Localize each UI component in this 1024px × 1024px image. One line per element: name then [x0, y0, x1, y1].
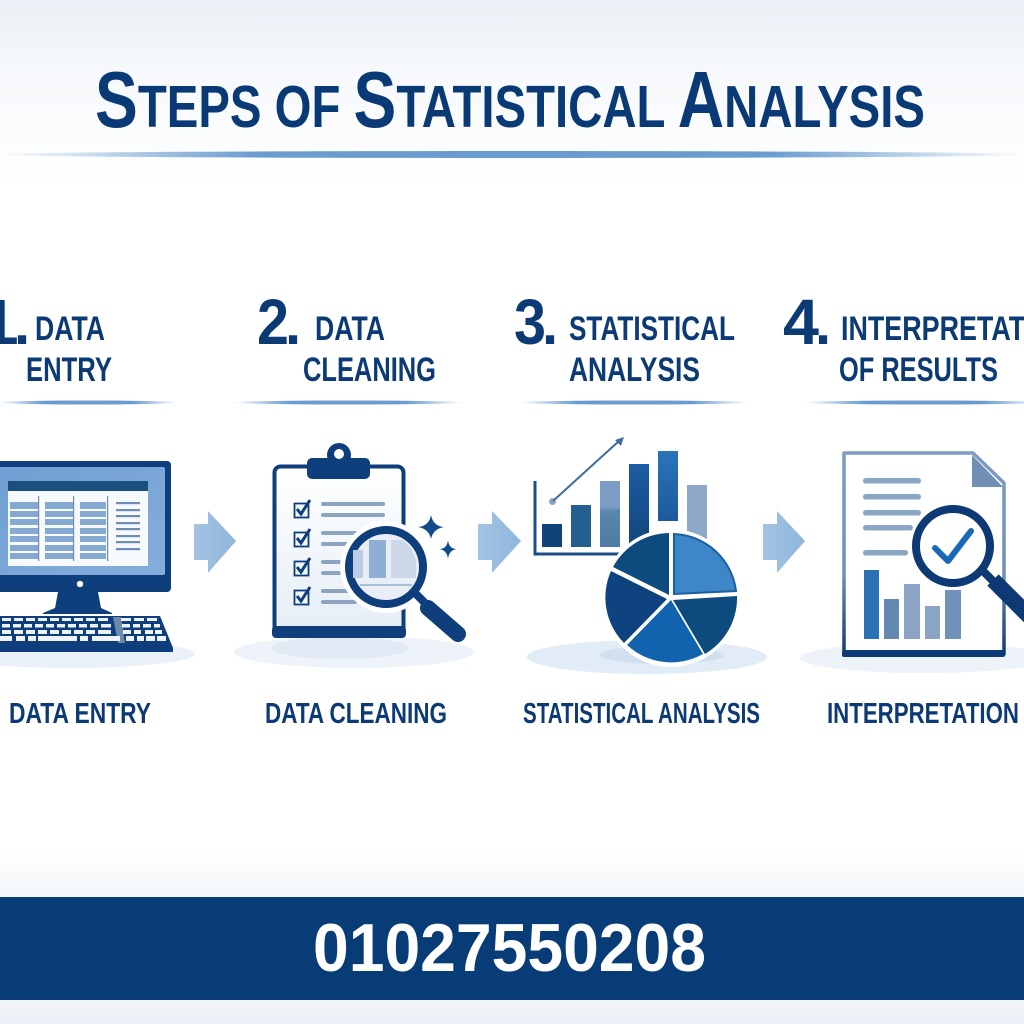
clipboard board [274, 466, 404, 634]
step 4 heading [783, 286, 1024, 389]
step 2 rule [232, 400, 464, 404]
title: STEPS OF STATISTICAL ANALYSIS [95, 55, 925, 144]
step 1 heading: . [14, 292, 30, 357]
axes [535, 481, 620, 554]
step 3 heading: 3 [514, 286, 546, 358]
arrow 1 [194, 511, 236, 573]
step 1 rule [0, 400, 178, 404]
step 3 heading [514, 286, 735, 389]
step 2 heading: . [285, 292, 301, 357]
pie [602, 529, 740, 667]
caption: statistical analysis: STATISTICAL ANALYSIS [523, 698, 760, 730]
icon: report with magnifier [800, 453, 1024, 673]
keyboard [0, 616, 173, 652]
step 2 heading: CLEANING [303, 351, 436, 389]
phone number: 01027550208 [313, 910, 706, 986]
step 4 rule [804, 400, 1024, 404]
report bars [864, 570, 879, 639]
step 3 heading: STATISTICAL [569, 310, 735, 348]
text lines [863, 478, 921, 556]
step 4 heading: . [815, 292, 831, 357]
bars [542, 524, 562, 547]
magnifier [909, 502, 997, 590]
step 3 heading: . [542, 292, 558, 357]
caption: data entry: DATA ENTRY [9, 698, 151, 730]
step 2 heading: 2 [257, 286, 289, 358]
arrow 2 [478, 511, 521, 573]
document [844, 453, 1004, 654]
step 4 heading: 4 [783, 286, 819, 358]
step 1 heading [0, 286, 112, 389]
footer band [0, 897, 1024, 1000]
icon: bar and pie charts [527, 437, 767, 674]
clip [307, 443, 370, 479]
caption: data cleaning: DATA CLEANING [265, 698, 447, 730]
step 3 rule [518, 400, 750, 404]
arrow 3 [763, 511, 805, 573]
spreadsheet [8, 481, 148, 566]
monitor [0, 461, 171, 592]
step 1 heading: ENTRY [26, 351, 112, 389]
step 3 heading: ANALYSIS [569, 351, 700, 389]
step 2 heading: DATA [315, 310, 385, 348]
sparkles [418, 515, 444, 539]
trend arrow [549, 437, 624, 505]
magnifier [340, 521, 432, 613]
checklist [294, 500, 310, 604]
step 2 heading [257, 286, 436, 389]
icon: computer [0, 461, 195, 668]
title rule [0, 151, 1024, 158]
step 1 heading: DATA [35, 310, 105, 348]
icon: clipboard with magnifier [234, 443, 474, 668]
